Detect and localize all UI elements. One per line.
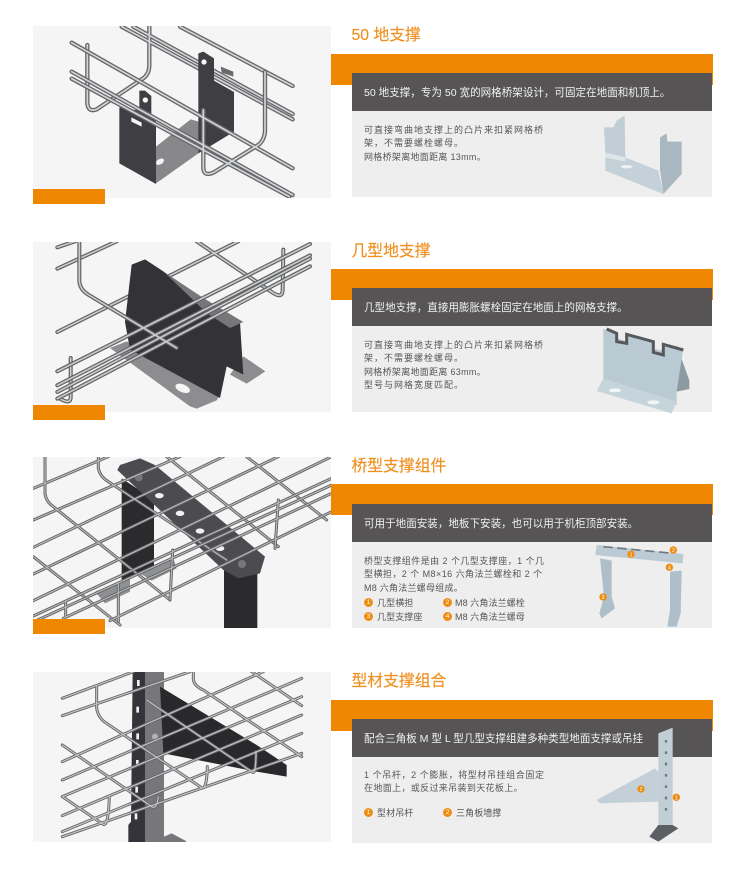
orange bar bbox=[331, 484, 713, 515]
light body panel bbox=[352, 757, 712, 843]
light body panel bbox=[352, 111, 712, 197]
lead text: 50 地支撑，专为 50 宽的网格桥架设计，可固定在地面和机顶上。 bbox=[364, 87, 670, 99]
panel: profile support combination bbox=[33, 672, 713, 843]
legend item 4: M8 六角法兰螺母 bbox=[455, 612, 525, 622]
product: bridge support assembly: 4 bbox=[668, 565, 671, 571]
product: bridge support assembly: 3 bbox=[602, 595, 605, 601]
legend item 1: 1 bbox=[367, 599, 370, 606]
light body panel bbox=[352, 326, 712, 412]
panel: 50 floor support bbox=[33, 26, 713, 204]
lead text: 配合三角板 M 型 L 型几型支撑组建多种类型地面支撑或吊挂 bbox=[364, 733, 643, 745]
dark lead strip bbox=[352, 719, 712, 757]
body text bbox=[364, 556, 544, 593]
dark lead strip bbox=[352, 504, 712, 542]
body text bbox=[364, 770, 545, 793]
legend item 1: 1 bbox=[367, 809, 370, 816]
panel: gantry floor support bbox=[33, 242, 713, 420]
light body panel bbox=[352, 542, 712, 628]
body text bbox=[364, 125, 544, 162]
lead text: 可用于地面安装，地板下安装，也可以用于机柜顶部安装。 bbox=[364, 518, 638, 530]
lead text: 几型地支撑，直接用膨胀螺栓固定在地面上的网格支撑。 bbox=[364, 302, 628, 314]
body text: M8 六角法兰螺母组成。 bbox=[364, 583, 463, 593]
body text: 架，不需要螺栓螺母。 bbox=[364, 353, 464, 363]
product: bridge support assembly: 1 bbox=[630, 552, 633, 558]
product: profile support: 1 bbox=[675, 795, 678, 801]
legend item 2: 2 bbox=[446, 599, 449, 606]
bracket: gantry support bbox=[110, 259, 265, 409]
upright post bbox=[128, 672, 186, 842]
body text: 1 个吊杆，2 个膨胀，将型材吊挂组合固定 bbox=[364, 770, 545, 780]
product: bridge support assembly bbox=[595, 545, 684, 627]
legend item 2: M8 六角法兰螺栓 bbox=[455, 598, 525, 608]
body text bbox=[364, 340, 544, 390]
legend item 2: 2 bbox=[446, 809, 449, 816]
orange bar bbox=[331, 700, 713, 731]
heading: 桥型支撑组件 bbox=[352, 458, 446, 475]
product: 50 floor support bbox=[604, 116, 682, 194]
heading: 几型地支撑 bbox=[352, 243, 430, 260]
legend item 3: 几型支撑座 bbox=[377, 612, 423, 622]
orange tab bbox=[33, 619, 105, 634]
bracket: floor plate bbox=[119, 52, 234, 184]
body text: 可直接弯曲地支撑上的凸片来扣紧网格桥 bbox=[364, 340, 544, 350]
orange tab bbox=[33, 405, 105, 420]
body text: 型号与网格宽度匹配。 bbox=[364, 380, 464, 390]
panel: bridge support assembly bbox=[33, 457, 713, 634]
photo: 50 floor support on wire tray bbox=[33, 26, 331, 198]
triangular bracket bbox=[160, 687, 287, 777]
legend item 2: 三角板墙撑 bbox=[456, 808, 502, 818]
upright: left bbox=[122, 478, 154, 583]
body text: 网格桥架离地面距离 63mm。 bbox=[364, 367, 486, 377]
product: bridge support assembly: 2 bbox=[672, 548, 675, 554]
body text: 可直接弯曲地支撑上的凸片来扣紧网格桥 bbox=[364, 125, 544, 135]
body text: 网格桥架离地面距离 13mm。 bbox=[364, 152, 486, 162]
legend item 3: 3 bbox=[367, 613, 370, 620]
heading: 型材支撑组合 bbox=[352, 673, 446, 690]
photo: profile support on wire tray bbox=[33, 672, 331, 842]
legend bbox=[364, 598, 525, 622]
body text: 型横担，2 个 M8×16 六角法兰螺栓和 2 个 bbox=[364, 569, 543, 579]
legend item 1: 几型横担 bbox=[377, 598, 413, 608]
orange bar bbox=[331, 269, 713, 300]
body text: 在地面上，或反过来吊装到天花板上。 bbox=[364, 783, 523, 793]
dark lead strip bbox=[352, 288, 712, 326]
legend item 4: 4 bbox=[446, 613, 449, 620]
heading: 50 地支撑 bbox=[352, 27, 421, 44]
legend bbox=[364, 808, 502, 818]
orange bar bbox=[331, 54, 713, 85]
photo: gantry floor support on wire tray bbox=[33, 242, 331, 412]
product: profile support bbox=[596, 728, 680, 842]
product: profile support: 2 bbox=[640, 787, 643, 793]
photo: bridge support assembly on wire tray bbox=[33, 457, 331, 628]
dark lead strip bbox=[352, 73, 712, 111]
product: gantry floor support bbox=[596, 328, 690, 414]
body text: 架，不需要螺栓螺母。 bbox=[364, 138, 464, 148]
orange tab bbox=[33, 189, 105, 204]
beam bbox=[117, 458, 265, 578]
body text: 桥型支撑组件是由 2 个几型支撑座，1 个几 bbox=[364, 556, 544, 566]
legend item 1: 型材吊杆 bbox=[377, 808, 413, 818]
upright: right bbox=[224, 570, 257, 628]
